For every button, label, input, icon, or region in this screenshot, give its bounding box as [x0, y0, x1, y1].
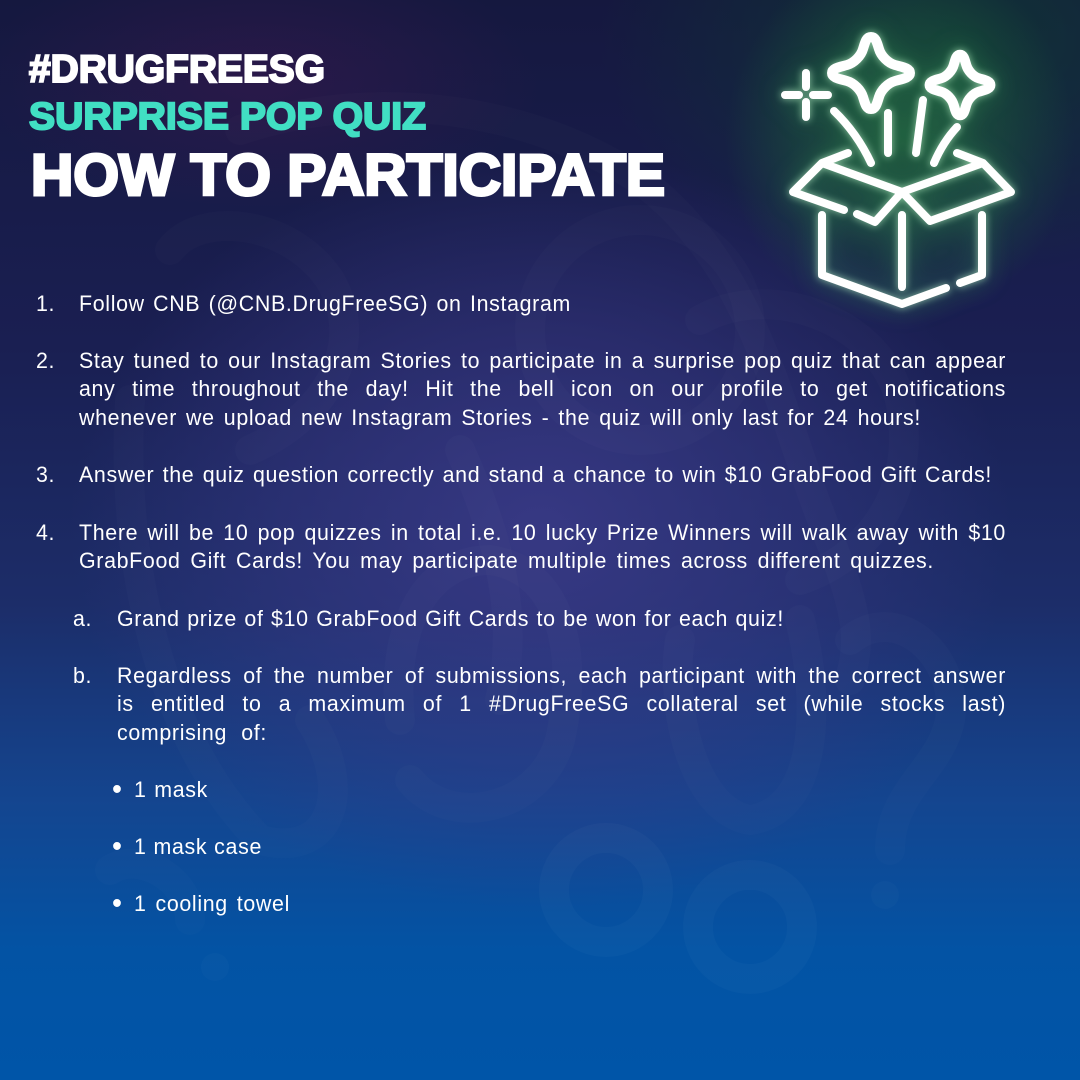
list item 2: 2.	[36, 348, 55, 373]
bullet: 1 mask	[112, 773, 208, 806]
bullet: 1 mask: •	[112, 773, 122, 806]
bullet: 1 cooling towel	[112, 887, 290, 920]
sub-item a: a.	[73, 606, 92, 631]
sub-item b: Regardless of the number of submissions, each participant with the correct answer	[117, 663, 1006, 688]
icon: neon gift box with sparkles	[776, 24, 1022, 316]
icon: small sparkle	[785, 73, 828, 117]
list item 2	[36, 348, 1006, 430]
list item 3: 3.	[36, 462, 55, 487]
list item 4: There will be 10 pop quizzes in total i.e. 10 lucky Prize Winners will walk away with $10	[79, 520, 1006, 545]
list item 3: Answer the quiz question correctly and stand a chance to win $10 GrabFood Gift Cards!	[79, 462, 992, 487]
icon: box body	[822, 215, 982, 304]
bullet: 1 cooling towel: 1 cooling towel	[134, 891, 290, 916]
icon: rays	[834, 100, 957, 163]
bullet: 1 mask: 1 mask	[134, 777, 208, 802]
list item 4: 4.	[36, 520, 55, 545]
list item 1: 1.	[36, 291, 55, 316]
heading: SURPRISE POP QUIZ: SURPRISE POP QUIZ	[29, 96, 426, 138]
list item 4: GrabFood Gift Cards! You may participate multiple times across different quizzes.	[79, 548, 934, 573]
sub-item b	[73, 663, 1006, 745]
icon: large star	[832, 37, 910, 109]
list item 2: Stay tuned to our Instagram Stories to participate in a surprise pop quiz that can appear	[79, 348, 1006, 373]
list item 2: whenever we upload new Instagram Stories - the quiz will only last for 24 hours!	[79, 405, 921, 430]
sub-item b: comprising of:	[117, 720, 267, 745]
icon: small star	[930, 55, 990, 115]
icon: box lid flaps	[793, 153, 1011, 222]
bullet: 1 mask case: •	[112, 830, 122, 863]
title block	[28, 50, 665, 200]
bullet: 1 cooling towel: •	[112, 887, 122, 920]
list item 4	[36, 520, 1006, 573]
bullet: 1 mask case: 1 mask case	[134, 834, 262, 859]
list item 1: Follow CNB (@CNB.DrugFreeSG) on Instagram	[79, 291, 571, 316]
bullet: 1 mask case	[112, 830, 262, 863]
sub-item a: Grand prize of $10 GrabFood Gift Cards to be won for each quiz!	[117, 606, 784, 631]
sub-item b: is entitled to a maximum of 1 #DrugFreeSG collateral set (while stocks last)	[117, 691, 1006, 716]
sub-item b: b.	[73, 663, 92, 688]
list item 2: any time throughout the day! Hit the bell icon on our profile to get notifications	[79, 376, 1006, 401]
